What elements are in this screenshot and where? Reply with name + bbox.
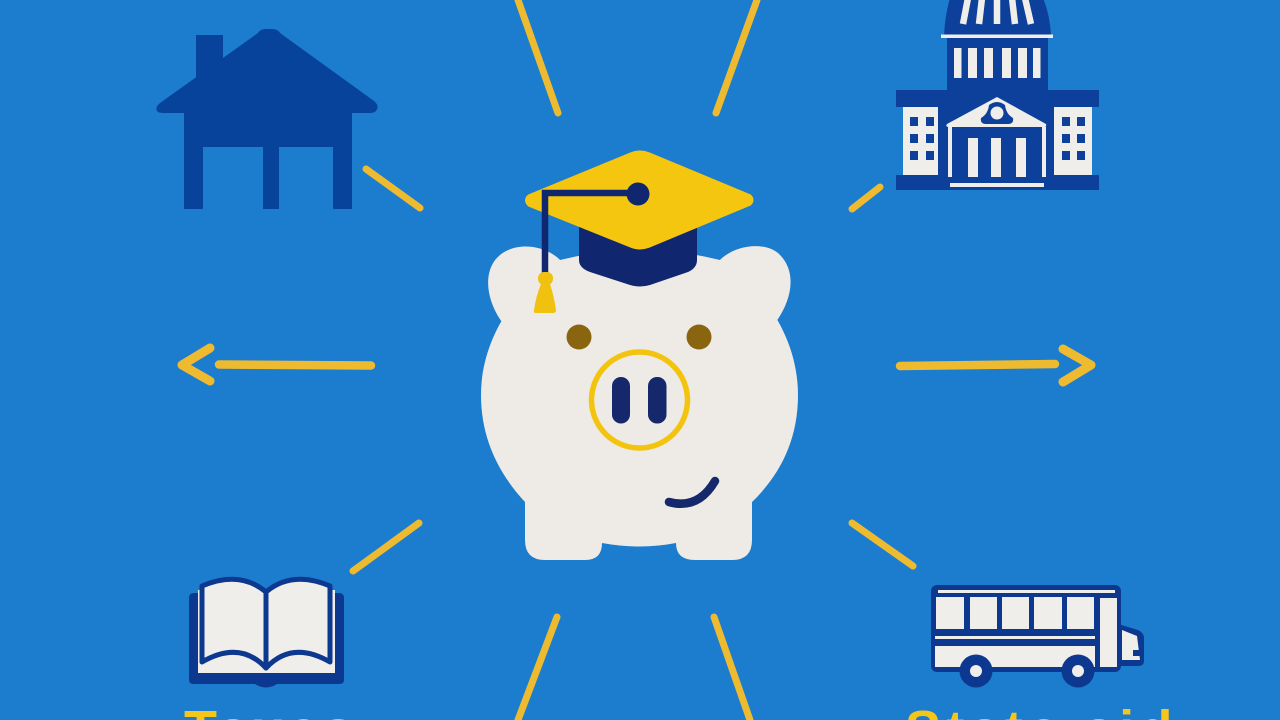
icon: graduation cap xyxy=(528,154,750,313)
icon: school bus xyxy=(931,585,1144,688)
eyes xyxy=(566,324,712,350)
smile xyxy=(669,481,715,504)
snout xyxy=(592,352,688,448)
icon: piggy bank xyxy=(481,246,798,560)
icon: capitol building xyxy=(896,0,1099,190)
rays and arrows xyxy=(182,0,1091,720)
pig body xyxy=(481,246,798,560)
icon: open book xyxy=(189,579,344,688)
icon: house xyxy=(156,29,378,209)
